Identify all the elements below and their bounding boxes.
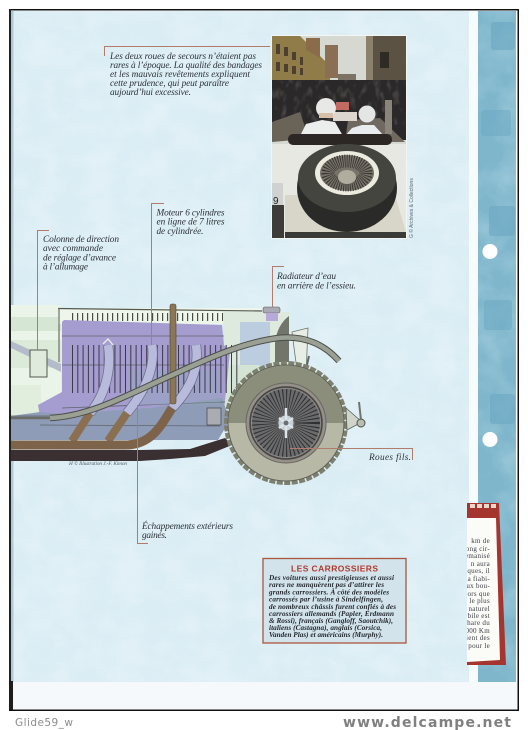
panel: red-framed card with cropped text: tient des	[464, 634, 490, 642]
watermark: left: Glide59_w	[15, 717, 73, 729]
callout: spare wheels: et les mauvais revêtements expliquent	[110, 70, 250, 80]
panel body text: Des voitures aussi prestigieuses et aussi	[268, 574, 394, 582]
callout: engine: de cylindrée.	[156, 227, 204, 237]
dark chassis shadow	[11, 438, 232, 461]
panel body text: italiens (Castagna), anglais (Corsica,	[269, 624, 382, 632]
callout: wire wheels: Roues fils.	[368, 452, 411, 463]
panel body text: & Rossi), français (Gangloff, Saoutchik),	[269, 617, 393, 625]
panel body text: de nombreux châssis furent confiés à des	[269, 603, 396, 611]
photo: rear view of vintage car with spare wheel	[271, 35, 407, 239]
callout: exhausts: Échappements extérieurs	[141, 520, 233, 532]
panel body text	[268, 574, 396, 639]
panel: red-framed card with cropped text: share du	[464, 619, 490, 627]
photo: rear view of vintage car with spare wheel: 9	[273, 196, 279, 207]
diagonal steering column and box	[11, 341, 61, 377]
panel body text: rares ne manquèrent pas d’attirer les	[269, 581, 384, 589]
vertical cooling slots	[72, 345, 240, 393]
callout: spare wheels: rares à l’époque. La qualité des bandages	[110, 61, 262, 71]
callout: steering column: Colonne de direction	[43, 235, 119, 245]
cabin pale background	[11, 305, 61, 417]
vertical brown strap	[170, 304, 176, 404]
illustration: vintage car side cutaway	[11, 304, 365, 483]
callout: spare wheels: cette prudence, qui peut paraître	[110, 79, 229, 89]
radiator section	[223, 307, 309, 412]
callout: spare wheels: Les deux roues de secours n’étaient pas	[109, 52, 256, 62]
callout: steering column: de réglage d’avance	[43, 254, 116, 264]
panel: red-framed card with cropped text: obile est	[464, 612, 490, 620]
callout: engine: Moteur 6 cylindres	[156, 208, 225, 218]
callout: radiator: Radiateur d’eau	[276, 272, 336, 282]
panel: red-framed card with cropped text: 000 Km	[465, 627, 490, 635]
panel body text: carrossiers allemands (Papler, Erdmann	[269, 610, 394, 618]
panel: blue side strip with punched holes	[478, 11, 516, 682]
exhaust pipes	[11, 339, 197, 445]
callout: engine: en ligne de 7 litres	[156, 218, 225, 228]
callout: steering column	[38, 230, 119, 350]
panel body text: Vanden Plas) et américains (Murphy).	[269, 631, 383, 639]
photo credit: G © Archives & Collections	[408, 178, 415, 238]
callout: steering column: à l’allumage	[43, 262, 88, 272]
panel: red-framed card with cropped text: emanisé	[465, 552, 490, 560]
panel: les carrossiers	[263, 558, 406, 643]
callout: radiator: en arrière de l’essieu.	[277, 282, 356, 292]
panel: red-framed card with cropped text: iques, il	[465, 567, 490, 575]
illustration credit: H © Illustration J.-F. Kimon	[68, 460, 127, 467]
panel: red-framed card with cropped text: ong cir-	[466, 545, 490, 553]
callout: exhausts	[138, 405, 233, 544]
starting handle	[346, 402, 365, 430]
callout: exhausts: gainés.	[142, 531, 167, 541]
callout: spare wheels	[104, 46, 270, 98]
panel: red-framed card with cropped text: naturel	[468, 605, 490, 613]
panel: red-framed card with cropped text: ux bou-	[466, 582, 490, 590]
panel: red-framed card with cropped text: pour le	[468, 642, 490, 650]
running fender	[11, 337, 339, 418]
panel: red-framed card with cropped text: la fiabi-	[465, 575, 490, 583]
callout: steering column: avec commande	[43, 244, 103, 254]
panel: red-framed card with cropped text: lors que	[465, 590, 490, 598]
callout: engine	[152, 204, 225, 345]
panel: red-framed card with cropped text	[464, 503, 506, 665]
callout: wire wheels	[290, 448, 412, 463]
panel: red-framed card with cropped text: le plus	[469, 597, 490, 605]
panel: red-framed card with cropped text: n aura	[471, 560, 491, 568]
panel body text: grands carrossiers. À côté des modèles	[268, 586, 389, 596]
panel: red-framed card with cropped text: km de	[471, 537, 490, 545]
panel: light blue textured page	[11, 11, 469, 682]
callout: spare wheels: aujourd’hui excessive.	[110, 88, 191, 98]
front wheel	[226, 363, 346, 483]
callout: radiator	[272, 266, 356, 307]
panel heading: LES CARROSSIERS	[291, 564, 378, 574]
engine block	[38, 320, 230, 416]
lower body	[11, 398, 230, 440]
hood top with louvers	[58, 308, 263, 362]
panel body text: carrossés par l’usine à Sindelfingen,	[269, 596, 383, 604]
